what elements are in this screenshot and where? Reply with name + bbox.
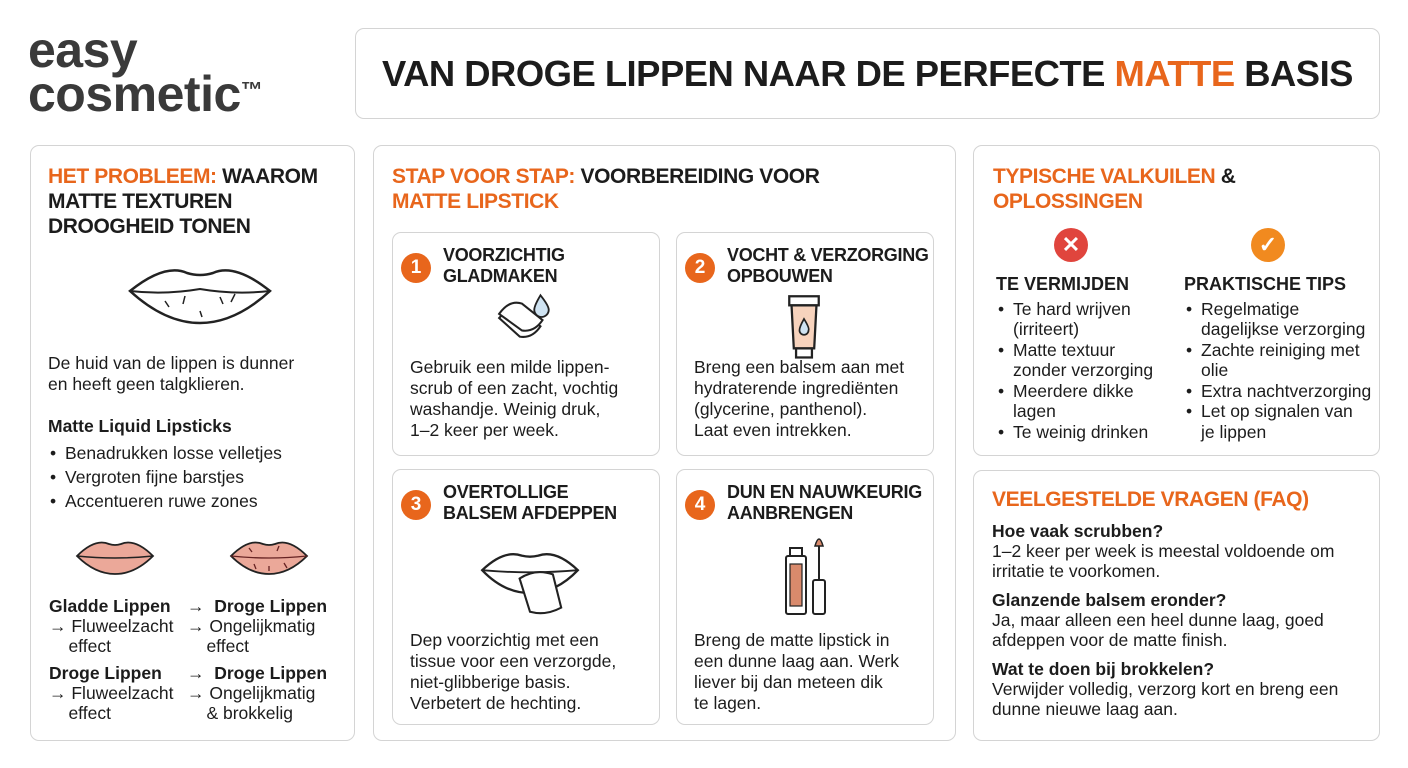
column: tips: Regelmatige — [1201, 298, 1299, 318]
card 3: niet-glibberige basis. — [410, 672, 571, 692]
card 4: DUN EN NAUWKEURIG — [727, 482, 922, 502]
column: avoid: TE VERMIJDEN — [996, 274, 1129, 294]
card 3: 3 — [411, 494, 421, 515]
heading: OPLOSSINGEN — [993, 190, 1143, 213]
card 4: een dunne laag aan. Werk — [694, 651, 899, 671]
heading: MATTE LIPSTICK — [392, 190, 559, 213]
card 2: hydraterende ingrediënten — [694, 378, 898, 398]
icon: tube — [788, 295, 820, 359]
card 3 — [392, 469, 660, 725]
column: tips — [1184, 274, 1371, 442]
card 4: Breng de matte lipstick in — [694, 630, 890, 650]
card 2 — [676, 232, 934, 456]
icon: washcloth — [498, 294, 550, 338]
column: avoid: Te weinig drinken — [1013, 422, 1148, 442]
card 1: 1–2 keer per week. — [410, 420, 559, 440]
icon: lips with tissue — [480, 553, 580, 614]
icon: cross — [1054, 228, 1088, 262]
list: matte liquid: Benadrukken losse velletjes — [65, 443, 282, 463]
card 3: Dep voorzichtig met een — [410, 630, 599, 650]
card 1: VOORZICHTIG — [443, 245, 565, 265]
card 1: 1 — [411, 257, 421, 278]
text: skin: en heeft geen talgklieren. — [48, 374, 245, 394]
column: tips: Extra nachtverzorging — [1201, 380, 1371, 400]
heading — [48, 165, 318, 238]
column: tips: Let op signalen van — [1201, 401, 1353, 421]
column: avoid — [996, 274, 1153, 442]
title box — [355, 28, 1380, 119]
icon: cracked lips — [128, 269, 272, 324]
list: matte liquid: Matte Liquid Lipsticks — [48, 416, 232, 436]
card 1: Gebruik een milde lippen- — [410, 357, 609, 377]
column: avoid: Te hard wrijven — [1013, 298, 1131, 318]
panel: problem: → Fluweelzacht — [49, 683, 174, 703]
card 4: AANBRENGEN — [727, 503, 853, 523]
card 3: BALSEM AFDEPPEN — [443, 503, 617, 523]
logo: easy — [28, 22, 137, 78]
icon: dry lips — [230, 542, 308, 575]
panel: problem: → Droge Lippen — [187, 596, 327, 616]
panel: problem: Droge Lippen — [49, 663, 162, 683]
comparison text — [49, 596, 327, 723]
icon: lipstick bottle — [785, 538, 826, 615]
card 3: tissue voor een verzorgde, — [410, 651, 616, 671]
panel: problem: → Ongelijkmatig — [187, 616, 315, 636]
list: matte liquid — [48, 416, 282, 511]
panel: problem: → Droge Lippen — [187, 663, 327, 683]
faq items: 1–2 keer per week is meestal voldoende om irritatie te voorkomen. Glanzende balsem eronder? — [992, 541, 1334, 610]
card 1 — [392, 232, 660, 456]
column: tips: PRAKTISCHE TIPS — [1184, 274, 1346, 294]
heading: DROOGHEID TONEN — [48, 215, 250, 238]
icon: check — [1251, 228, 1285, 262]
faq items — [992, 521, 1338, 719]
panel: FAQ — [973, 470, 1380, 741]
card 1: scrub of een zacht, vochtig — [410, 378, 618, 398]
text: skin: De huid van de lippen is dunner — [48, 353, 294, 373]
card 2: OPBOUWEN — [727, 266, 833, 286]
column: tips: dagelijkse verzorging — [1201, 319, 1365, 339]
column: avoid: (irriteert) — [1013, 319, 1079, 339]
heading: HET PROBLEEM: WAAROM — [48, 165, 318, 188]
column: tips: Zachte reiniging met — [1201, 340, 1360, 360]
card 1: GLADMAKEN — [443, 266, 557, 286]
card 2: Breng een balsem aan met — [694, 357, 904, 377]
column: avoid: lagen — [1013, 401, 1056, 421]
faq items: Hoe vaak scrubben? — [992, 521, 1163, 541]
title box: VAN DROGE LIPPEN NAAR DE PERFECTE MATTE BASIS — [382, 53, 1353, 94]
heading: STAP VOOR STAP: VOORBEREIDING VOOR — [392, 165, 819, 188]
logo — [28, 22, 262, 122]
card 3: Verbetert de hechting. — [410, 693, 581, 713]
icon: check: ✓ — [1259, 232, 1277, 257]
heading — [993, 165, 1236, 213]
panel: problem: → Fluweelzacht — [49, 616, 174, 636]
panel: steps — [373, 145, 956, 741]
logo: cosmetic™ — [28, 66, 262, 122]
column: tips: je lippen — [1201, 422, 1266, 442]
faq items: Ja, maar alleen een heel dunne laag, goed afdeppen voor de matte finish. Wat te doen bij brokkelen? — [992, 610, 1324, 679]
panel: problem: Gladde Lippen — [49, 596, 171, 616]
panel: pitfalls — [973, 145, 1380, 456]
card 4: te lagen. — [694, 693, 761, 713]
panel: problem: effect — [68, 636, 111, 656]
card 1: washandje. Weinig druk, — [410, 399, 600, 419]
heading — [392, 165, 820, 213]
list: matte liquid: Vergroten fijne barstjes — [65, 467, 244, 487]
card 2: (glycerine, panthenol). — [694, 399, 867, 419]
icon: smooth lips — [76, 542, 154, 575]
panel: problem: → Ongelijkmatig — [187, 683, 315, 703]
card 2: 2 — [695, 257, 705, 278]
card 4 — [676, 469, 934, 725]
card 2: Laat even intrekken. — [694, 420, 852, 440]
column: avoid: Meerdere dikke — [1013, 380, 1134, 400]
icon: cross: ✕ — [1062, 232, 1080, 257]
card 3: OVERTOLLIGE — [443, 482, 568, 502]
panel: problem: & brokkelig — [206, 703, 293, 723]
heading: TYPISCHE VALKUILEN & — [993, 165, 1235, 188]
panel: problem: effect — [68, 703, 111, 723]
panel: problem: effect — [206, 636, 249, 656]
column: tips: olie — [1201, 360, 1228, 380]
card 4: 4 — [695, 494, 705, 515]
heading: VEELGESTELDE VRAGEN (FAQ) — [992, 488, 1309, 511]
faq items: Verwijder volledig, verzorg kort en breng een dunne nieuwe laag aan. — [992, 679, 1338, 719]
list: matte liquid: Accentueren ruwe zones — [65, 491, 258, 511]
column: avoid: Matte textuur — [1013, 340, 1115, 360]
card 2: VOCHT & VERZORGING — [727, 245, 929, 265]
text: skin — [48, 353, 294, 394]
column: avoid: zonder verzorging — [1013, 360, 1153, 380]
panel: problem — [30, 145, 355, 741]
heading: MATTE TEXTUREN — [48, 190, 232, 213]
card 4: liever bij dan meteen dik — [694, 672, 883, 692]
